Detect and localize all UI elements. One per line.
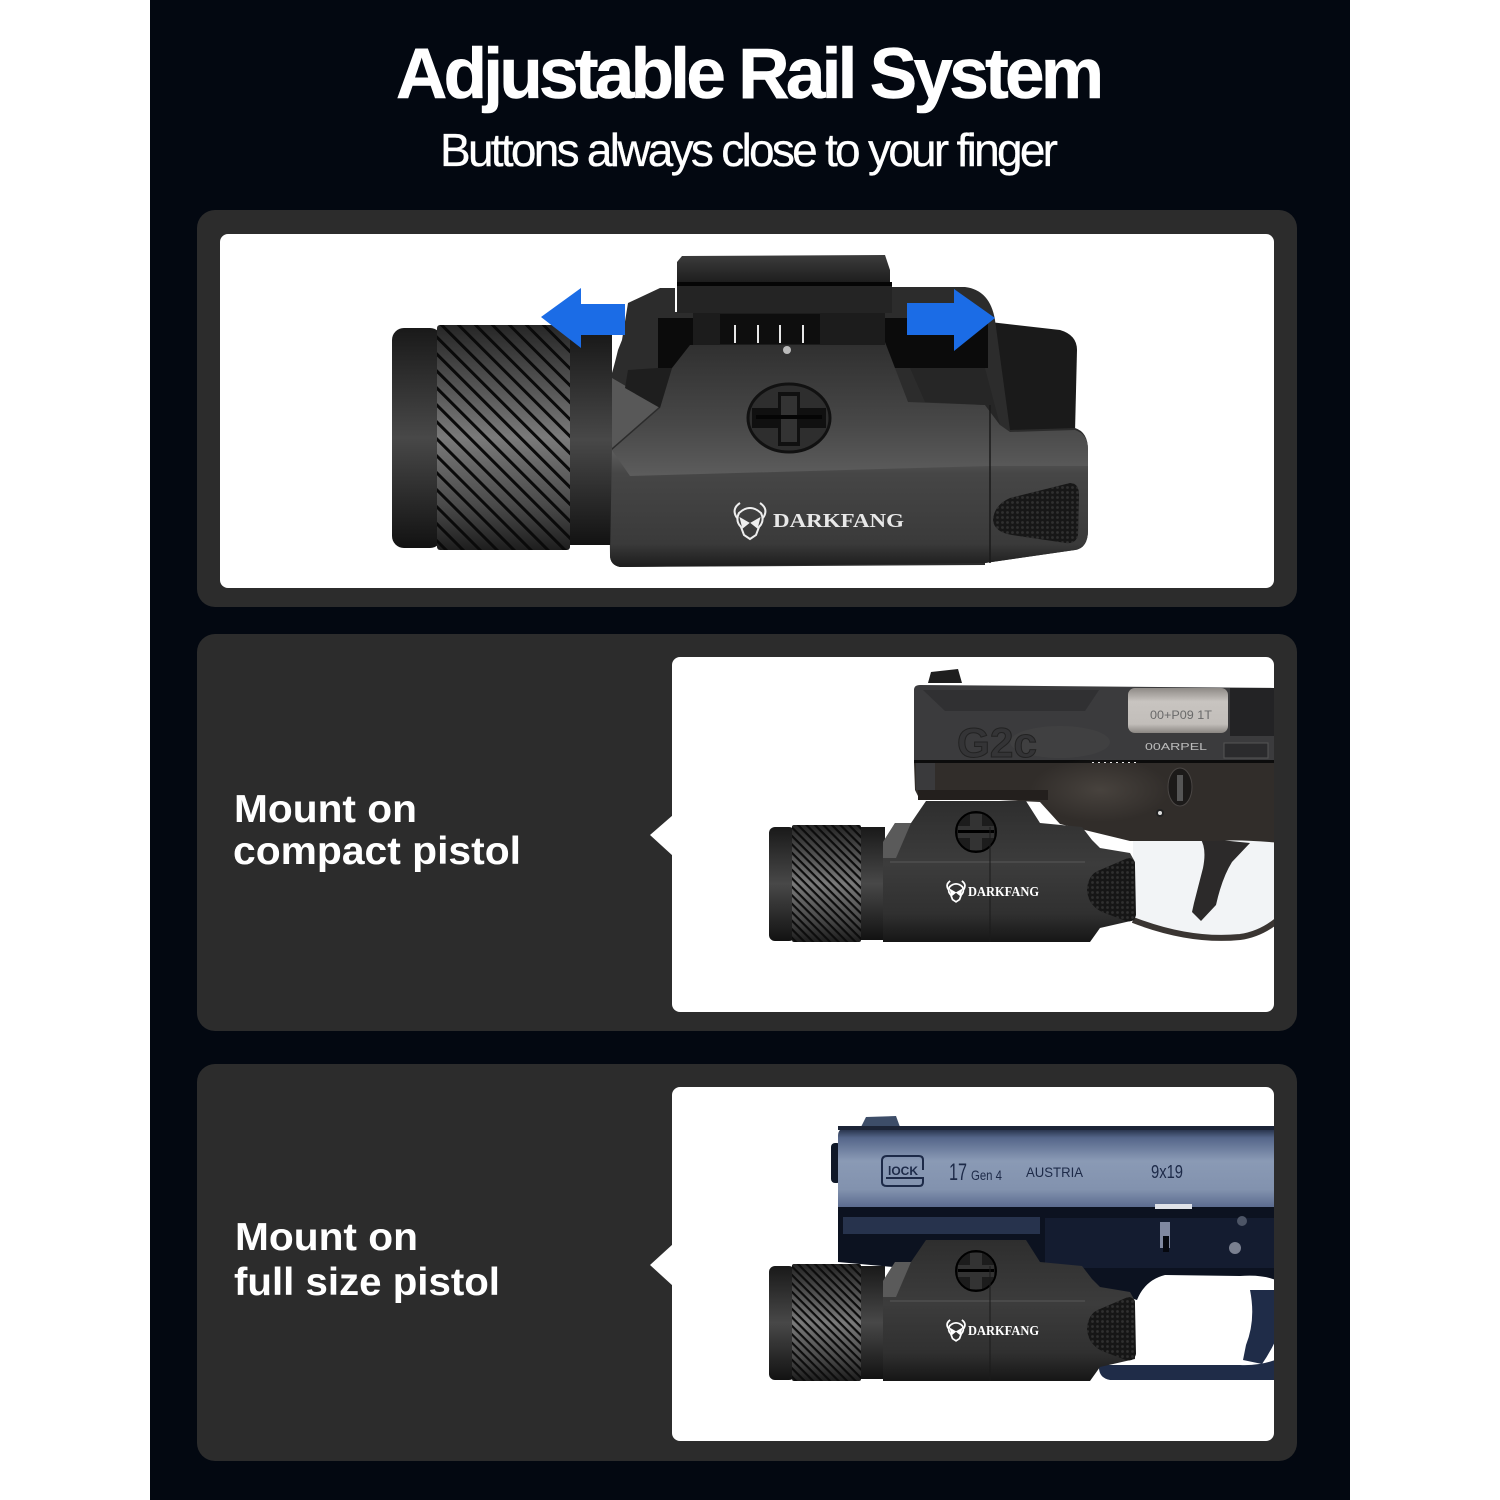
adjustment screw xyxy=(748,384,830,452)
label: compact pistol: compact pistol xyxy=(233,830,521,873)
slide engraving: lOCK xyxy=(888,1164,918,1178)
brand logo xyxy=(947,1320,1039,1341)
image panel: compact xyxy=(672,657,1274,1012)
compact pistol photo: 00+P09 1T xyxy=(1150,708,1213,722)
dark page background xyxy=(150,0,1350,1500)
flashlight: full size mount xyxy=(769,1240,1136,1381)
label: compact pistol xyxy=(233,788,521,873)
compact pistol photo: G2c xyxy=(957,719,1037,766)
infographic canvas xyxy=(150,0,1350,1500)
compact pistol photo xyxy=(914,669,1280,938)
brand logo: DARKFANG xyxy=(968,1324,1039,1339)
slide engraving: AUSTRIA xyxy=(1026,1164,1084,1180)
slide engraving: 9x19 xyxy=(1151,1162,1183,1182)
flashlight: compact mount xyxy=(769,801,1136,942)
pointer xyxy=(650,815,673,856)
slide engraving: Gen 4 xyxy=(971,1167,1002,1183)
full size pistol photo xyxy=(831,1116,1280,1380)
panel: compact pistol xyxy=(197,634,1297,1031)
brand logo xyxy=(735,503,905,539)
slide engraving xyxy=(888,1164,1182,1180)
title: Adjustable Rail System xyxy=(396,35,1104,114)
image panel: full size xyxy=(672,1087,1274,1441)
panel: adjustable rail xyxy=(197,210,1297,607)
label: compact pistol: Mount on xyxy=(234,788,417,831)
arrow: slide right xyxy=(907,289,995,351)
panel: full size pistol xyxy=(197,1064,1297,1461)
pointer xyxy=(650,1244,673,1286)
label: full size pistol: full size pistol xyxy=(234,1261,500,1304)
rail clamp xyxy=(677,255,892,313)
brand logo xyxy=(947,881,1039,902)
slide engraving: 17 xyxy=(949,1159,967,1186)
compact pistol photo: 00ARPEL xyxy=(1145,742,1208,753)
activation button xyxy=(993,483,1079,543)
label: full size pistol: Mount on xyxy=(235,1216,418,1259)
flashlight: large side view xyxy=(392,255,1088,567)
arrow: slide left xyxy=(541,288,625,348)
subtitle: Buttons always close to your finger xyxy=(440,124,1058,176)
brand logo: DARKFANG xyxy=(773,510,905,532)
brand logo: DARKFANG xyxy=(968,885,1039,900)
label: full size pistol xyxy=(234,1216,500,1304)
